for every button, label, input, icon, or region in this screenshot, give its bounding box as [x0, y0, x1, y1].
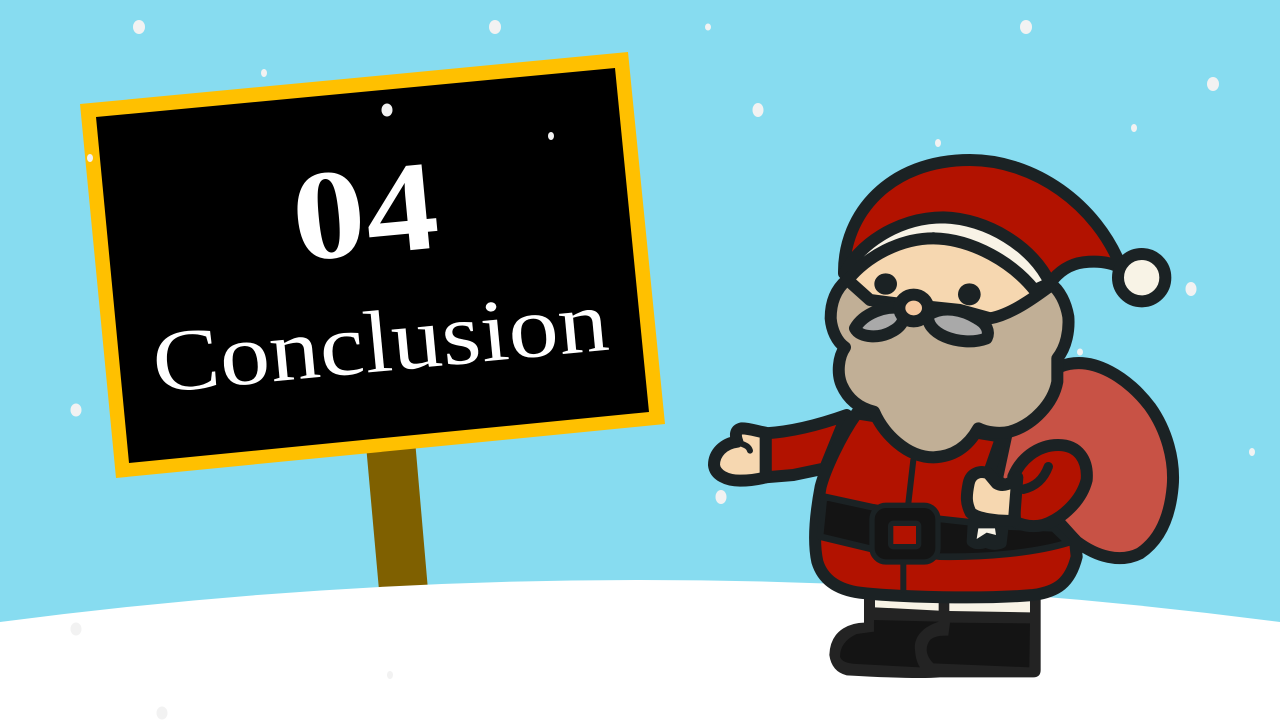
section title: Conclusion: [148, 272, 612, 412]
string tip: [977, 528, 996, 539]
nose: [899, 295, 928, 321]
face: [848, 238, 1050, 318]
belt buckle: [872, 505, 938, 562]
right boot: [927, 623, 1030, 667]
sign post: [366, 440, 428, 590]
right fur cuff: [949, 600, 1030, 612]
leg and boot outline: [829, 593, 1041, 678]
hat band: [845, 217, 1050, 290]
belt: [820, 497, 1068, 557]
left boot: [840, 620, 939, 667]
buckle centre: [891, 523, 919, 547]
sign board: [80, 52, 665, 478]
legs and boots: [829, 593, 1041, 678]
thumb line: [737, 442, 750, 451]
left fur cuff: [875, 597, 939, 611]
left hand: [714, 428, 766, 481]
beard: [831, 280, 1069, 457]
moustache left: [855, 308, 904, 336]
right arm curl: [1013, 445, 1087, 526]
hat pompom: [1118, 254, 1165, 301]
left arm: [766, 415, 847, 477]
snow hill: [0, 580, 1280, 720]
hat: [844, 160, 1122, 283]
eyes: [874, 273, 981, 305]
moustache right: [928, 309, 988, 341]
curl line: [1023, 467, 1048, 489]
coat: [815, 413, 1077, 597]
coat centre seam: [903, 460, 913, 590]
section number: 04: [286, 134, 444, 289]
sack string: [972, 523, 1004, 545]
Santa illustration: [714, 160, 1173, 678]
sack: [997, 363, 1173, 558]
right hand: [967, 472, 1017, 521]
